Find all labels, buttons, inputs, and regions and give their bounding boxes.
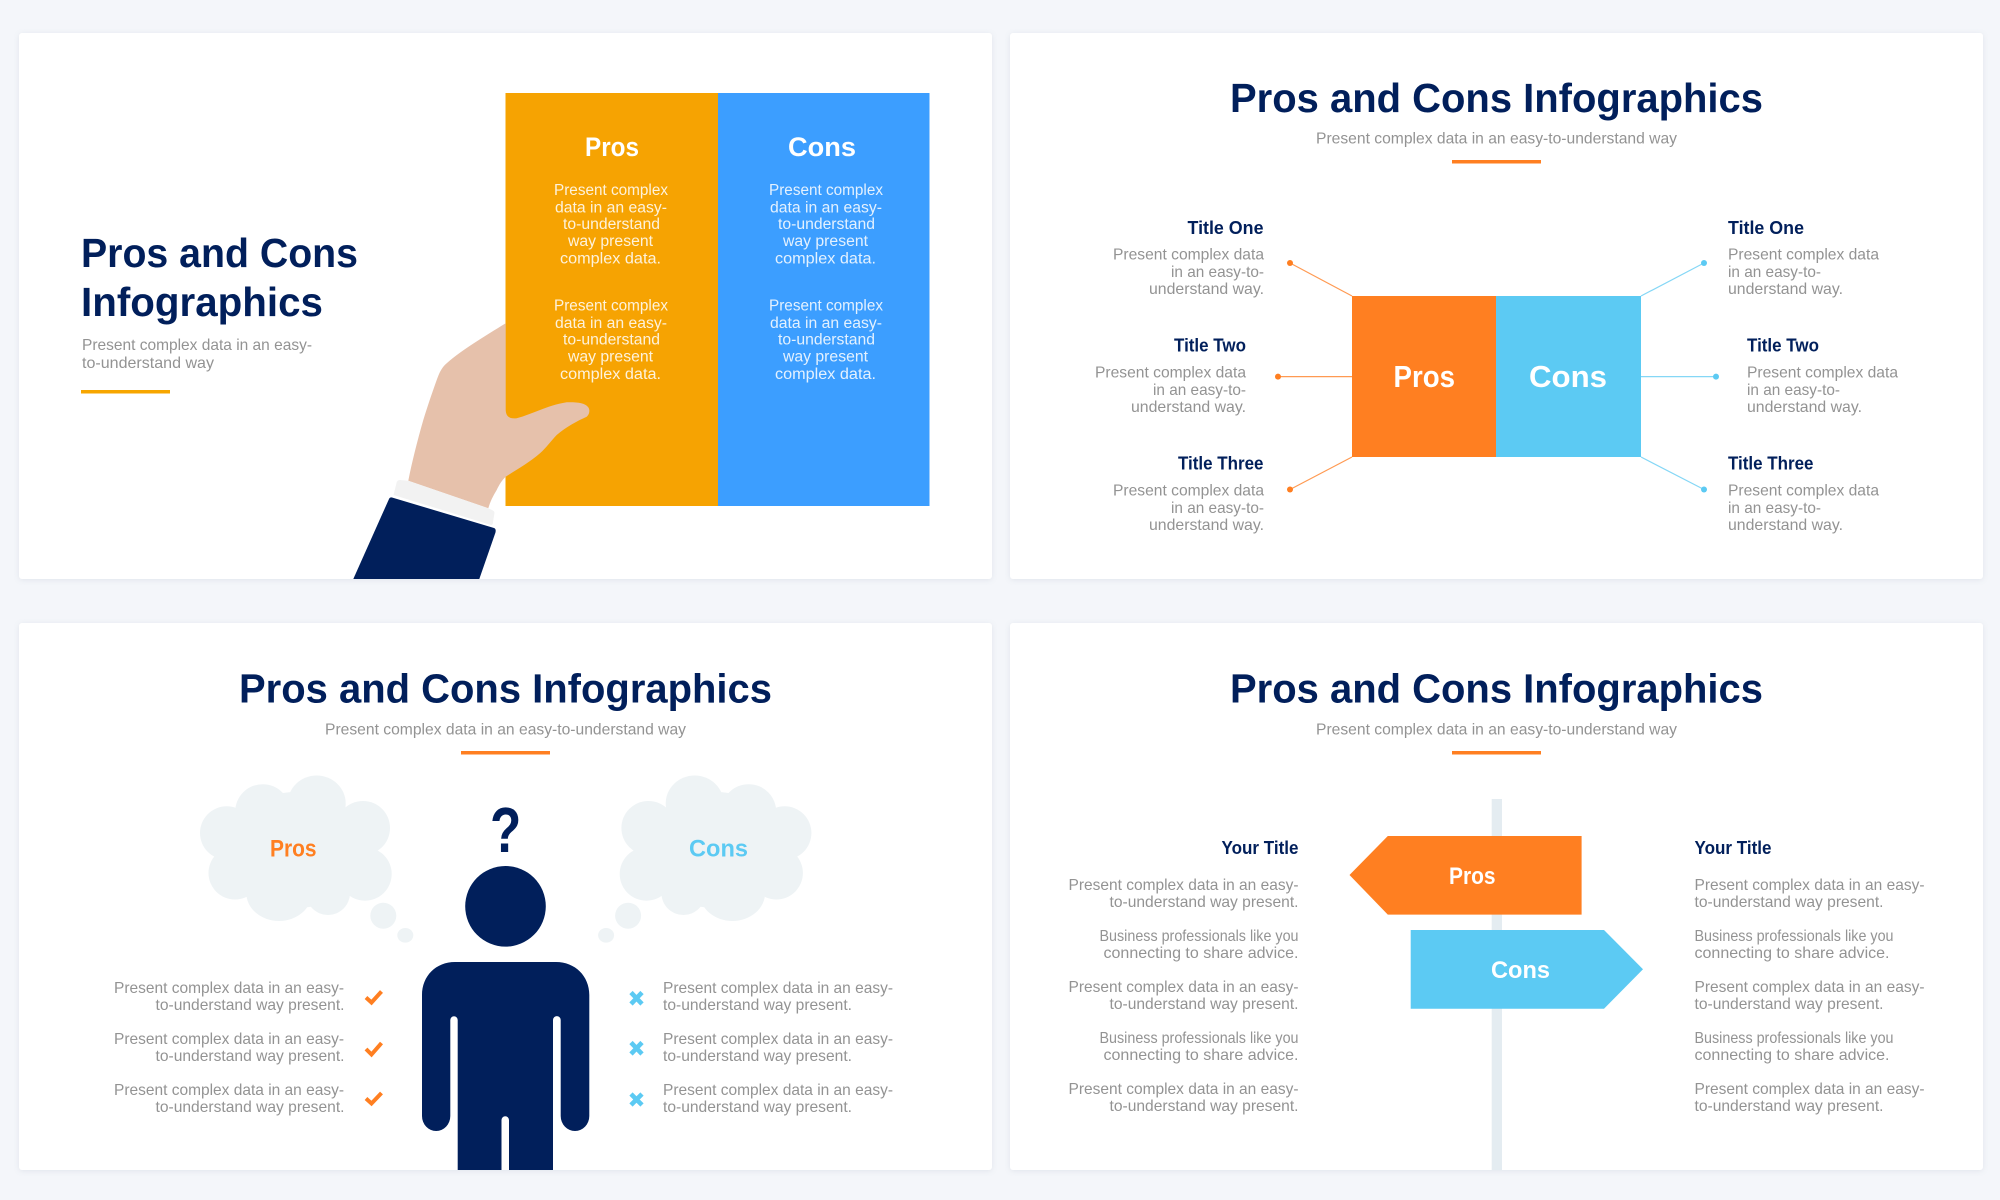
board: orange pros column: data in an easy-: [555, 315, 667, 332]
text block: left title three: [1113, 454, 1264, 534]
box: pros: [1352, 296, 1496, 457]
board: orange pros column: way present: [567, 233, 654, 250]
text block: left title three: Title Three: [1178, 454, 1264, 474]
text block: left title one: Title One: [1188, 218, 1264, 238]
board: orange pros column: way present: [567, 348, 654, 366]
text block: right title three: in an easy-to-: [1728, 500, 1821, 517]
text block: right title three: Title Three: [1728, 454, 1814, 474]
text block: left title two: in an easy-to-: [1153, 382, 1246, 399]
label: pros in cloud: Pros: [270, 836, 316, 862]
text block: left column: connecting to share advice.: [1104, 1047, 1298, 1064]
text block: panel one subtitle: to-understand way: [82, 355, 214, 372]
board: orange pros column: complex data.: [560, 366, 661, 383]
list: pros points: [114, 980, 344, 1116]
text block: left column: Present complex data in an easy-: [1068, 877, 1298, 894]
text block: right title one: in an easy-to-: [1728, 264, 1821, 281]
text block: left column: to-understand way present.: [1110, 1098, 1298, 1115]
text block: right column: Present complex data in an easy-: [1694, 1081, 1924, 1098]
board: orange pros column: Pros: [585, 132, 639, 162]
list: pros points: to-understand way present.: [156, 1048, 344, 1065]
text block: panel one subtitle: [82, 337, 312, 372]
icons: orange check marks: [366, 992, 382, 1104]
text block: right title two: in an easy-to-: [1747, 382, 1840, 399]
accent line: panel four: [1452, 751, 1541, 754]
board: blue cons column: complex data.: [775, 366, 876, 383]
board: blue cons column: way present: [782, 348, 869, 366]
heading: panel one title: [81, 230, 358, 325]
text block: left title one: [1113, 218, 1264, 298]
heading: panel four title: Pros and Cons Infographics: [1230, 666, 1763, 712]
text block: left column: Present complex data in an easy-: [1068, 1081, 1298, 1098]
text block: left column: to-understand way present.: [1110, 894, 1298, 911]
text block: left column: Business professionals like you: [1100, 928, 1298, 945]
icon: pros thought cloud: [200, 776, 413, 943]
icon: question mark: ?: [490, 796, 521, 866]
list: cons points: to-understand way present.: [663, 1099, 852, 1116]
text block: right title three: Present complex data: [1728, 482, 1879, 500]
text block: left title one: in an easy-to-: [1171, 264, 1264, 281]
connectors: cons: [1641, 260, 1719, 492]
box: pros: Pros: [1394, 359, 1455, 394]
list: cons points: to-understand way present.: [663, 1048, 852, 1065]
text block: left column: Your Title: [1222, 838, 1298, 858]
text block: right column: Business professionals like you: [1694, 928, 1894, 945]
text block: left title one: Present complex data: [1113, 246, 1264, 264]
board: orange pros column: to-understand: [563, 332, 660, 348]
signpost pole: [1492, 799, 1502, 1170]
board: orange pros column: to-understand: [563, 216, 660, 233]
list: pros points: Present complex data in an easy-: [114, 1031, 344, 1048]
text block: right column: to-understand way present.: [1694, 894, 1884, 911]
text block: panel three subtitle: Present complex data in an easy-to-understand way: [325, 722, 686, 738]
text block: right title one: [1728, 218, 1879, 298]
text block: left title three: in an easy-to-: [1171, 500, 1264, 517]
text block: right title two: Title Two: [1747, 336, 1819, 356]
heading: panel one title: Pros and Cons: [81, 230, 358, 276]
text block: right title one: Title One: [1728, 218, 1804, 238]
arrow: pros sign pointing left: [1350, 836, 1582, 915]
board: blue cons column: Present complex: [769, 298, 883, 314]
box: cons: Cons: [1529, 359, 1607, 394]
text block: right title three: understand way.: [1728, 517, 1843, 534]
accent line: panel one: [81, 390, 170, 394]
arrow: cons sign pointing right: Cons: [1491, 957, 1550, 984]
label: cons in cloud: Cons: [689, 836, 748, 862]
box: cons: [1496, 296, 1641, 457]
text block: panel two subtitle: Present complex data in an easy-to-understand way: [1316, 130, 1677, 148]
heading: panel two title: Pros and Cons Infographics: [1230, 75, 1763, 121]
text block: left title two: understand way.: [1131, 399, 1246, 416]
text block: left title two: [1095, 336, 1246, 416]
icon: hand with cuff and sleeve: [353, 323, 589, 579]
text block: right title one: understand way.: [1728, 281, 1843, 298]
text block: panel four subtitle: Present complex data in an easy-to-understand way: [1316, 722, 1677, 738]
text block: right column: to-understand way present.: [1694, 1098, 1884, 1115]
text block: left column: [1068, 838, 1298, 1115]
heading: panel three title: Pros and Cons Infographics: [239, 666, 772, 712]
list: pros points: to-understand way present.: [156, 1099, 344, 1116]
connectors: pros: [1275, 260, 1352, 492]
text block: left column: Business professionals like you: [1100, 1030, 1298, 1047]
accent line: panel two: [1452, 160, 1541, 164]
accent line: panel three: [461, 751, 550, 754]
text block: right column: to-understand way present.: [1694, 996, 1884, 1013]
list: cons points: Present complex data in an easy-: [663, 1031, 893, 1048]
text block: left column: connecting to share advice.: [1104, 945, 1298, 962]
board: orange pros column: [506, 93, 718, 506]
text block: right column: connecting to share advice.: [1694, 945, 1890, 962]
text block: left title one: understand way.: [1149, 281, 1264, 298]
board: orange pros column: Present complex: [554, 298, 668, 314]
list: pros points: Present complex data in an easy-: [114, 1082, 344, 1099]
board: blue cons column: [718, 93, 930, 506]
text block: right column: Your Title: [1694, 838, 1772, 858]
icons: blue cross marks: [631, 992, 642, 1105]
list: cons points: Present complex data in an easy-: [663, 980, 893, 997]
icon: cons thought cloud: [598, 776, 811, 943]
text block: right title one: Present complex data: [1728, 246, 1879, 264]
board: blue cons column: Cons: [788, 132, 856, 162]
board: blue cons column: data in an easy-: [770, 315, 882, 332]
arrow: pros sign pointing left: Pros: [1449, 863, 1496, 890]
panel: signpost: [1010, 623, 1983, 1170]
board: blue cons column: to-understand: [778, 216, 875, 233]
text block: right title two: [1747, 336, 1898, 416]
list: cons points: to-understand way present.: [663, 997, 852, 1014]
text block: right column: [1694, 838, 1924, 1115]
text block: left column: Present complex data in an easy-: [1068, 979, 1298, 996]
board: blue cons column: way present: [782, 233, 869, 250]
arrow: cons sign pointing right: [1411, 930, 1643, 1009]
list: cons points: Present complex data in an easy-: [663, 1082, 893, 1099]
list: pros points: Present complex data in an easy-: [114, 980, 344, 997]
board: blue cons column: to-understand: [778, 332, 875, 348]
board: orange pros column: Present complex: [554, 182, 668, 199]
board: orange pros column: complex data.: [560, 250, 661, 268]
text block: left title two: Title Two: [1174, 336, 1246, 356]
text block: left title three: Present complex data: [1113, 482, 1264, 500]
text block: left title three: understand way.: [1149, 517, 1264, 534]
text block: right title two: understand way.: [1747, 399, 1862, 416]
text block: left column: to-understand way present.: [1110, 996, 1298, 1013]
list: cons points: [663, 980, 893, 1116]
heading: panel one title: Infographics: [81, 279, 323, 325]
board: blue cons column: complex data.: [775, 250, 876, 268]
text block: right column: connecting to share advice.: [1694, 1047, 1890, 1064]
text block: panel one subtitle: Present complex data in an easy-: [82, 337, 312, 354]
icon: person silhouette: [422, 866, 589, 1170]
board: blue cons column: Present complex: [769, 182, 883, 199]
panel: thinking person: [19, 623, 992, 1170]
text block: right title three: [1728, 454, 1879, 534]
text block: right column: Business professionals like you: [1694, 1030, 1894, 1047]
text block: right title two: Present complex data: [1747, 364, 1898, 382]
panel: pros and cons radial box: [1010, 33, 1983, 579]
panel: hand holding pros and cons board: [19, 33, 992, 579]
text block: right column: Present complex data in an easy-: [1694, 877, 1924, 894]
text block: right column: Present complex data in an easy-: [1694, 979, 1924, 996]
board: blue cons column: data in an easy-: [770, 200, 882, 216]
list: pros points: to-understand way present.: [156, 997, 344, 1014]
text block: left title two: Present complex data: [1095, 364, 1246, 382]
board: orange pros column: data in an easy-: [555, 200, 667, 216]
